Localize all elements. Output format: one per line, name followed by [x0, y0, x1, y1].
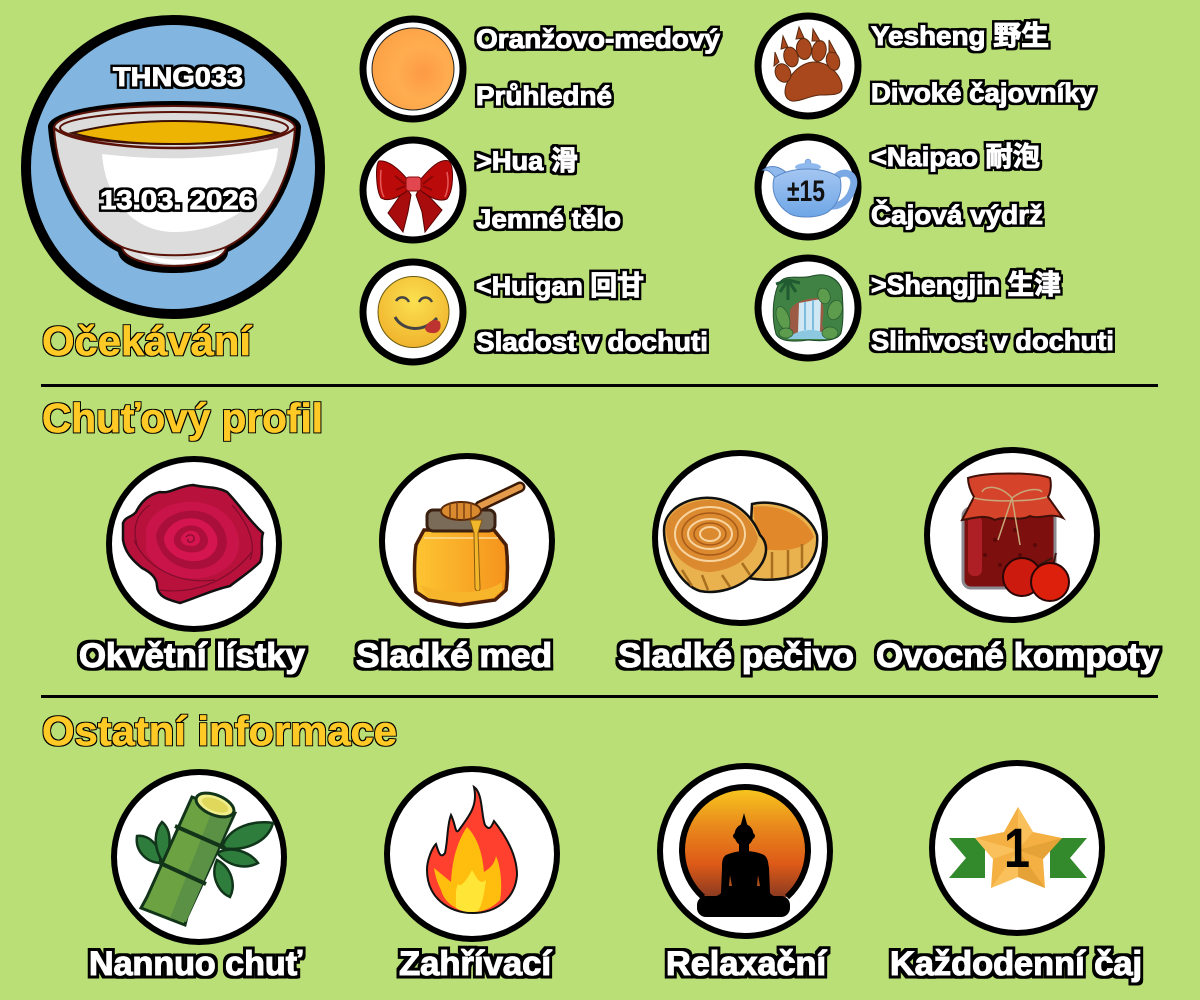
- Chinese term: naipao: <Naipao 耐泡: [871, 142, 1040, 172]
- panel: expectations: [26, 16, 1114, 364]
- salivation description: Slinivost v dochuti: [871, 326, 1114, 356]
- Chinese term: yesheng: Yesheng 野生: [871, 21, 1049, 51]
- flavour: fruit compote: [876, 450, 1159, 675]
- icon: smiley with tongue: [363, 262, 463, 362]
- attribute: salivation: [758, 258, 1114, 358]
- icon: flame: [387, 769, 557, 939]
- icon: Buddha silhouette: [660, 766, 830, 936]
- flavour label: Okvětní lístky: [79, 637, 305, 675]
- body description: Jemné tělo: [476, 204, 621, 234]
- info label: Nannuo chuť: [89, 945, 303, 983]
- icon: jam jar with cherries: [927, 450, 1097, 620]
- rank number: 1: [1004, 816, 1030, 879]
- icon: blue teapot: [758, 137, 858, 237]
- endurance description: Čajová výdrž: [871, 199, 1043, 230]
- icon: red bow: [363, 140, 463, 240]
- icon: star with ribbon: [932, 763, 1102, 933]
- Chinese term: hua: >Hua 滑: [476, 146, 578, 176]
- icon: mooncakes: [655, 453, 825, 623]
- Chinese term: huigan: <Huigan 回甘: [476, 271, 644, 301]
- heading: other information: Ostatní informace: [42, 708, 397, 754]
- wild tea trees: Divoké čajovníky: [871, 78, 1095, 108]
- icon: honey jar with dipper: [382, 456, 552, 626]
- flavour label: Sladké pečivo: [618, 637, 854, 675]
- attribute: tea endurance: [758, 137, 1043, 237]
- info label: Relaxační: [666, 945, 828, 983]
- heading: flavour profile: Chuťový profil: [42, 395, 323, 441]
- icon: bamboo stalk: [114, 772, 284, 942]
- flavour label: Sladké med: [356, 637, 552, 675]
- date label: 13.03. 2026: [100, 185, 255, 215]
- info label: Každodenní čaj: [890, 945, 1142, 983]
- flavour: sweet pastry: [618, 453, 854, 675]
- icon: orange colour swatch: [363, 19, 463, 119]
- icon: red rose: [109, 459, 279, 629]
- attribute: wild origin: [758, 16, 1095, 116]
- colour name: Oranžovo-medový: [476, 24, 720, 54]
- code label: THNG033: [113, 62, 243, 92]
- icon: jungle waterfall: [758, 258, 858, 358]
- info label: Zahřívací: [399, 945, 553, 983]
- info: nannuo taste: [89, 772, 303, 983]
- heading: expectations: Očekávání: [42, 318, 253, 364]
- flavour label: Ovocné kompoty: [876, 637, 1159, 675]
- Chinese term: shengjin: >Shengjin 生津: [871, 270, 1061, 300]
- icon: bear paw: [758, 16, 858, 116]
- attribute: body: [363, 140, 621, 240]
- flavour: petals: [79, 459, 305, 675]
- endurance value: ±15: [787, 175, 825, 208]
- info: everyday tea: [890, 763, 1142, 983]
- flavour: honey: [356, 456, 552, 675]
- clarity: Průhledné: [476, 81, 612, 111]
- info: warming: [387, 769, 557, 983]
- info: relaxing: [660, 766, 830, 983]
- aftertaste description: Sladost v dochuti: [476, 327, 708, 357]
- attribute: sweet aftertaste: [363, 262, 708, 362]
- panel: other information: [42, 708, 1142, 983]
- attribute: colour: [363, 19, 720, 119]
- tea bowl badge: [26, 20, 320, 314]
- panel: flavour profile: [42, 395, 1159, 675]
